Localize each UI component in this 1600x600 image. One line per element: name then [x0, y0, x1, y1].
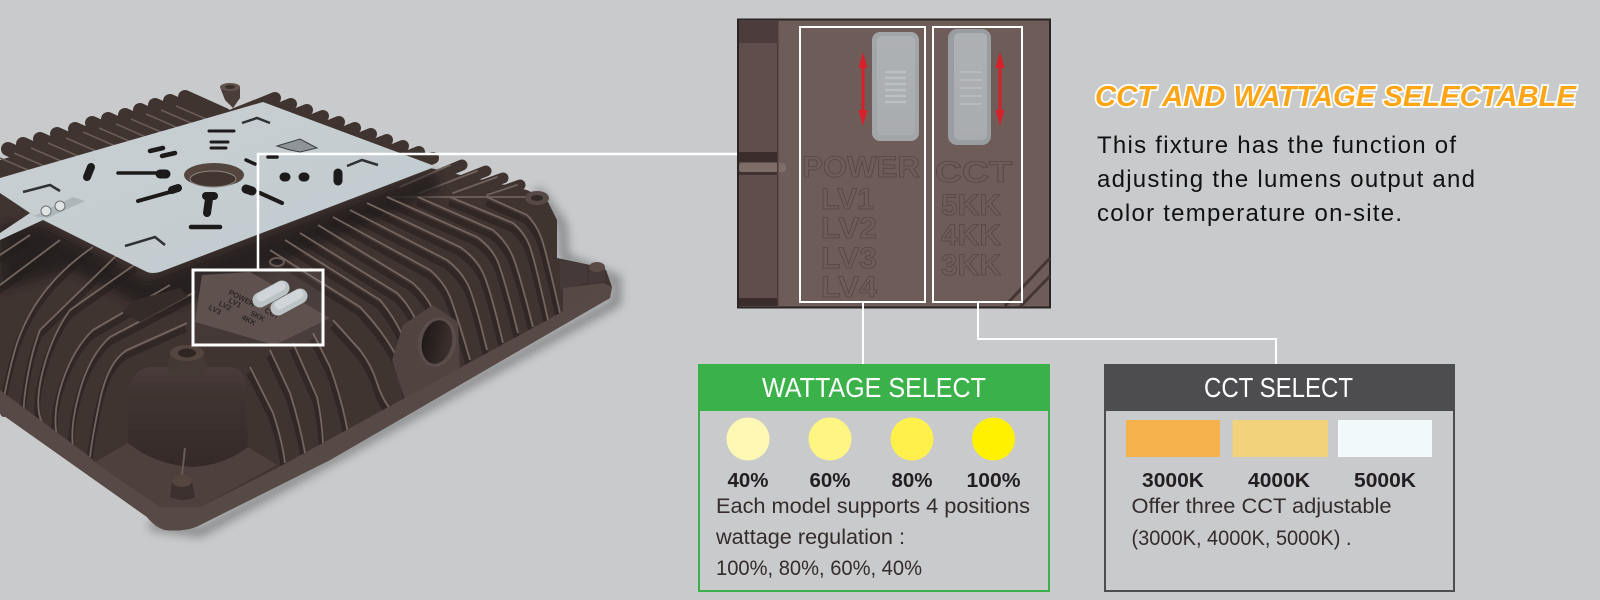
temperature labels: 5000K [1354, 470, 1417, 492]
side bracket strip [0, 213, 43, 240]
embossed power labels: LV2 [821, 212, 877, 245]
description text: This fixture has the function of [1097, 132, 1456, 159]
temperature labels [1142, 470, 1417, 492]
plate cast shadow [0, 172, 440, 310]
conduit boss with hole [392, 305, 461, 400]
wattage description: Each model supports 4 positions [716, 494, 1030, 518]
cct description [1132, 494, 1392, 550]
front corner ledge [95, 443, 277, 507]
cct title: CCT SELECT [1204, 372, 1353, 403]
bottom rim [0, 283, 612, 530]
wattage box outline [699, 365, 1049, 591]
embossed labels on fixture: POWER [227, 288, 257, 309]
color swatches [1126, 420, 1432, 457]
heading: CCT AND WATTAGE SELECTABLE [1095, 81, 1578, 113]
central plate hole [184, 163, 244, 187]
embossed labels on fixture: CCT [263, 306, 281, 321]
percent labels [728, 470, 1021, 492]
fin gap shading [0, 203, 559, 469]
right corner flange [560, 260, 603, 313]
fixture drop shadow [150, 190, 616, 532]
temperature labels: 3000K [1142, 470, 1205, 492]
panel: cct select [1104, 364, 1455, 591]
switch plateau front wall [195, 322, 275, 345]
description text: color temperature on-site. [1097, 200, 1402, 227]
wattage description: 100%, 80%, 60%, 40% [716, 556, 922, 580]
embossed cct labels: 3KK [941, 249, 1001, 282]
panel diagonal fin detail [1005, 258, 1050, 307]
embossed cct labels: 4KK [941, 219, 1001, 252]
embossed labels on fixture [207, 288, 281, 328]
front corner post [167, 345, 208, 377]
embossed labels on fixture: LV2 [217, 299, 233, 313]
cct header [1104, 364, 1455, 411]
embossed labels on fixture: 4KK [240, 313, 258, 328]
embossed labels on fixture: 5KK [249, 309, 267, 324]
embossed cct labels: 5KK [941, 189, 1001, 222]
embossed power labels: LV1 [821, 183, 874, 216]
cct highlight box [933, 27, 1022, 302]
brightness circles [726, 418, 1015, 460]
embossed cct labels [935, 156, 1012, 282]
embossed labels on fixture: LV1 [227, 296, 243, 310]
highlight rectangle on fixture [193, 270, 323, 345]
product photo: LED fixture housing [0, 83, 616, 532]
connector line from fixture to detail panel [258, 154, 738, 269]
embossed cct labels: CCT [935, 156, 1012, 189]
panel left column [739, 21, 786, 306]
percent labels: 80% [892, 470, 933, 492]
right corner post [589, 262, 605, 283]
cct slider [948, 29, 991, 145]
rear left fin teeth [8, 97, 225, 167]
power highlight box [800, 27, 925, 302]
embossed power labels [802, 151, 920, 304]
connector to cct select [978, 302, 1276, 364]
rear right fin teeth [235, 98, 433, 174]
front corner box [128, 367, 248, 467]
panel background [738, 20, 1050, 308]
right corner chevron fins [387, 165, 527, 197]
fixture base silhouette [0, 104, 612, 530]
connector to wattage select [862, 302, 864, 364]
fixture slide switches [260, 286, 300, 308]
embossed labels on fixture: LV3 [207, 303, 223, 317]
wattage description [715, 494, 1030, 580]
percent labels: 60% [810, 470, 851, 492]
embossed power labels: POWER [802, 151, 920, 184]
description text: adjusting the lumens output and [1097, 166, 1475, 193]
wattage adjustment arrow [858, 52, 868, 126]
cooling fin edges [0, 197, 560, 463]
switch plateau [195, 272, 330, 345]
cct description: (3000K, 4000K, 5000K) . [1132, 526, 1352, 550]
wattage description: wattage regulation : [715, 525, 905, 549]
panel: wattage select [698, 364, 1050, 591]
side bracket with screws [34, 197, 85, 218]
temperature labels: 4000K [1248, 470, 1311, 492]
embossed power labels: LV4 [821, 271, 877, 304]
cct description: Offer three CCT adjustable [1132, 494, 1392, 518]
rear fin light edges [0, 106, 414, 184]
right rear post [525, 191, 549, 205]
plate holes and slots [87, 131, 338, 227]
percent labels: 40% [728, 470, 769, 492]
rear small post ring [270, 258, 284, 266]
plate bracket cutouts [23, 118, 378, 246]
detail panel: switch close-up [738, 20, 1050, 308]
recessed side channel [122, 288, 188, 322]
cct box outline [1105, 365, 1454, 591]
small front post [170, 448, 195, 500]
plate spring clip [277, 139, 317, 152]
wattage header [698, 364, 1050, 411]
wattage title: WATTAGE SELECT [762, 372, 986, 403]
description text [1097, 132, 1475, 227]
mounting plate [0, 102, 432, 273]
top post [220, 83, 240, 108]
embossed power labels: LV3 [821, 242, 877, 275]
percent labels: 100% [966, 470, 1021, 492]
wattage slider [872, 32, 919, 141]
cct adjustment arrow [996, 52, 1004, 126]
